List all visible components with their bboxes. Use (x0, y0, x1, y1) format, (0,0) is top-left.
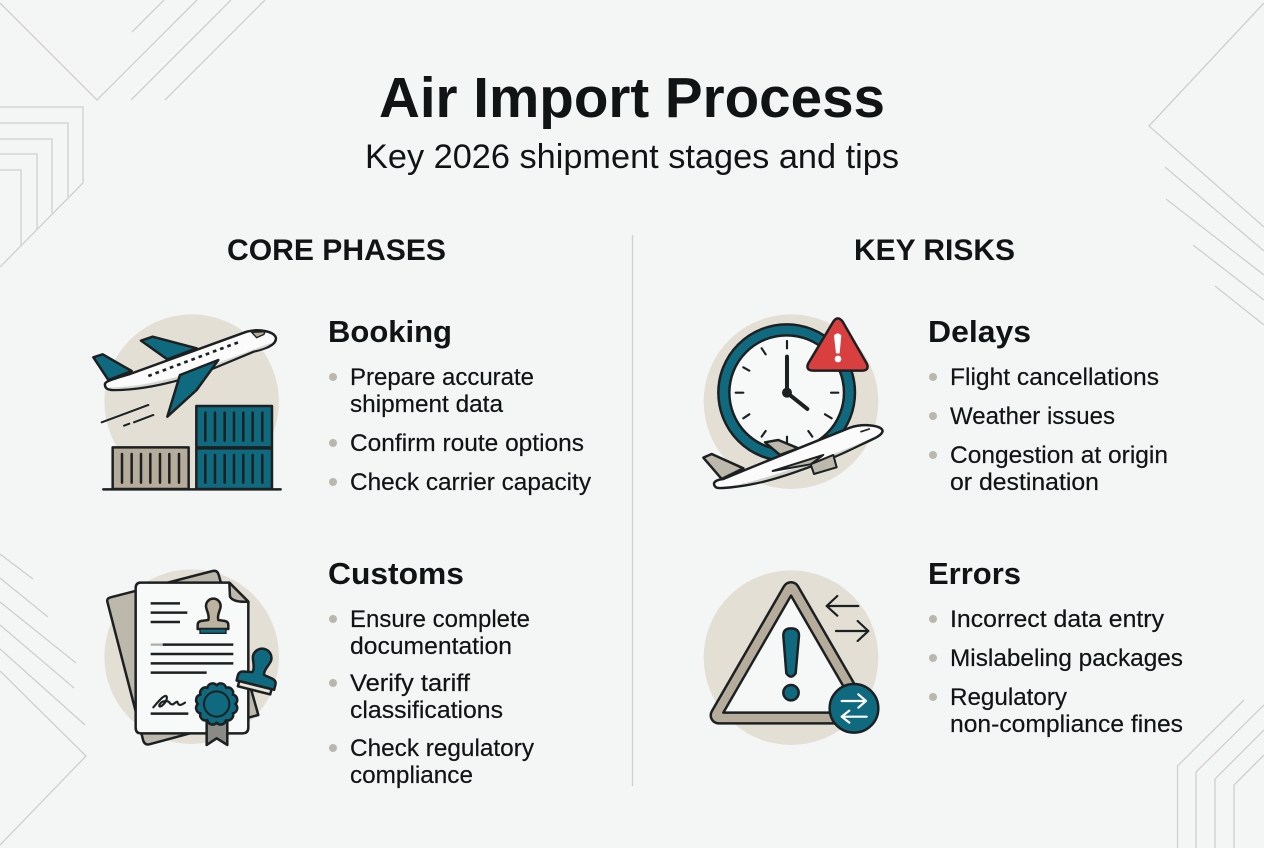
list: booking tips: shipment data (350, 391, 503, 418)
list: customs tips: Ensure complete (350, 606, 530, 633)
icon: warning triangle with exchange arrows (704, 570, 878, 745)
heading: customs: Customs (328, 556, 464, 591)
list: booking tips: Confirm route options (350, 430, 584, 457)
heading: core phases: CORE PHASES (227, 234, 446, 267)
heading: errors: Errors (928, 556, 1021, 591)
subtitle: Key 2026 shipment stages and tips (365, 138, 899, 176)
list: delay risks: or destination (950, 469, 1099, 496)
list: delay risks: Congestion at origin (950, 442, 1168, 469)
list: customs tips: compliance (350, 762, 473, 789)
list: booking tips: Check carrier capacity (350, 469, 592, 496)
panel: core phases (93, 234, 592, 789)
heading: booking: Booking (328, 314, 452, 349)
list: error risks: Regulatory (950, 684, 1068, 711)
list: delay risks (929, 364, 1168, 496)
list: customs tips: classifications (350, 697, 503, 724)
list: customs tips: Verify tariff (350, 670, 470, 697)
list: booking tips: Prepare accurate (350, 364, 534, 391)
list: customs tips (329, 606, 535, 789)
icon: plane and containers (93, 314, 281, 489)
list: delay risks: Weather issues (950, 403, 1115, 430)
list: customs tips: Check regulatory (350, 735, 535, 762)
heading: delays: Delays (928, 314, 1031, 349)
list: error risks: Incorrect data entry (950, 606, 1165, 633)
list: customs tips: documentation (350, 633, 512, 660)
list: error risks: non-compliance fines (950, 711, 1183, 738)
title: Air Import Process (379, 66, 885, 130)
icon: clock, warning and plane (703, 314, 883, 489)
list: error risks: Mislabeling packages (950, 645, 1183, 672)
panel: key risks (703, 234, 1183, 745)
list: error risks (929, 606, 1183, 738)
list: booking tips (329, 364, 592, 496)
list: delay risks: Flight cancellations (950, 364, 1159, 391)
heading: key risks: KEY RISKS (854, 234, 1015, 267)
icon: customs documents and stamp (104, 569, 283, 745)
